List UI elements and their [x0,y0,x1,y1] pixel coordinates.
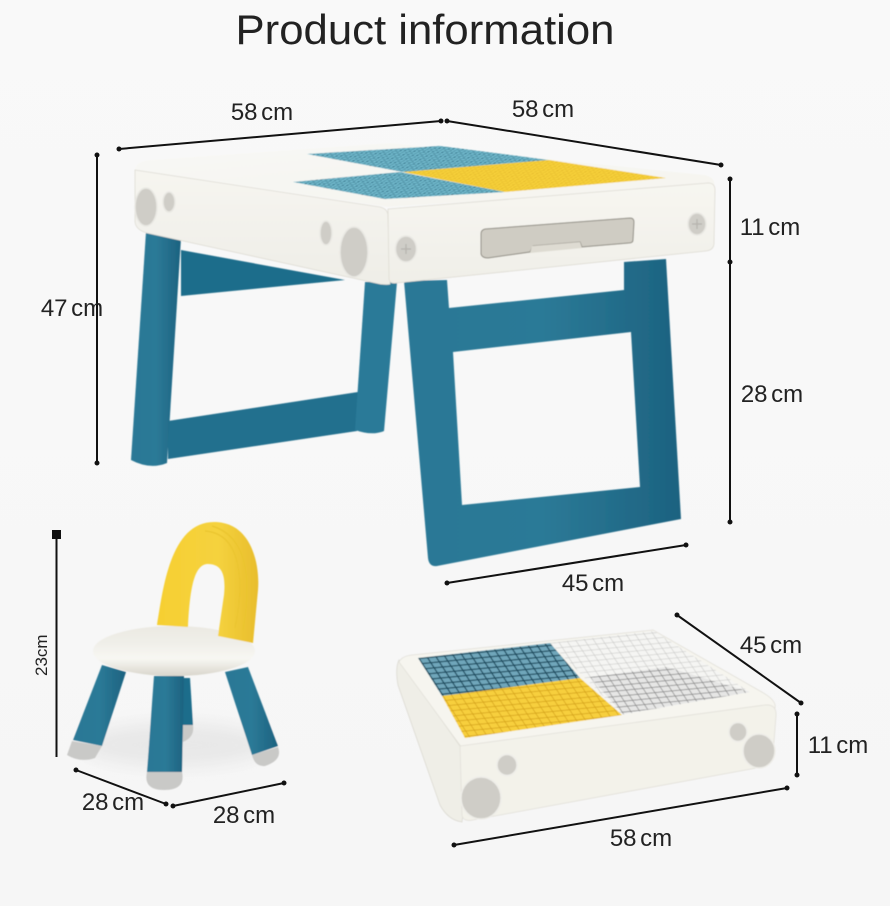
folded case top [399,630,775,748]
chair left leg [67,665,126,760]
chair centre leg [146,676,184,790]
building plate: teal [418,643,580,696]
building plate: teal back [307,146,549,172]
folded case left side [397,660,470,822]
dimension: chair depth 28 cm [74,768,168,816]
dimension: table width left 58 cm: 58 cm [231,99,293,126]
chair shadow [80,723,270,767]
chair back [157,522,258,643]
folded case front [460,705,776,820]
title: Product information [236,6,614,53]
table top surface [135,143,714,207]
dimension: folded width 58 cm: 58 cm [610,825,672,852]
dimension: folded height 11 cm: 11 cm [808,732,868,759]
chair back highlight ribs [205,526,247,630]
dimension: chair width 28 cm [170,780,286,829]
dimension: chair height 23cm [32,530,61,757]
drawer handle [481,218,634,258]
chair back leg [183,678,193,742]
back-left leg frame [131,232,397,466]
dimension: top thickness 11 cm: 11 cm [740,214,800,241]
building plate: yellow [442,678,622,738]
front-right leg frame [404,259,681,566]
building plate: yellow [403,160,666,192]
chair illustration [67,522,279,790]
dimension: folded depth 45 cm [674,612,804,706]
building plate: white [550,631,750,715]
building plate: teal front [293,172,505,199]
dimension: folded depth 45 cm: 45 cm [740,632,802,659]
dimension: table height 47 cm: 47 cm [41,295,103,322]
chair seat [93,626,255,676]
dimension: chair depth 28 cm: 28 cm [82,789,144,816]
table right face [388,183,715,283]
building plate: grey [590,667,750,714]
folded table illustration [397,630,776,822]
case discs and screws [461,722,775,819]
dimension: folded height 11 cm [794,712,868,778]
dimension: table height 47 cm [41,152,103,466]
left face discs and screws [135,188,368,277]
dimension: table depth right 58 cm: 58 cm [512,96,574,123]
dimension: leg height 28 cm [728,262,803,524]
table left face [135,170,390,284]
dimension: folded width 58 cm [452,786,790,852]
dimension: top thickness 11 cm [728,176,800,264]
dimension: leg width 45 cm [444,542,688,597]
dimension: leg height 28 cm: 28 cm [741,381,803,408]
dimension: chair width 28 cm: 28 cm [213,802,275,829]
dimension: chair height 23cm: 23cm [32,634,51,676]
folding table illustration [131,143,715,566]
dimension: leg width 45 cm: 45 cm [562,570,624,597]
right face screws [396,213,706,262]
dimension: table depth right 58 cm [444,96,724,168]
chair right leg [225,667,279,766]
dimension: table width left 58 cm [116,99,444,152]
